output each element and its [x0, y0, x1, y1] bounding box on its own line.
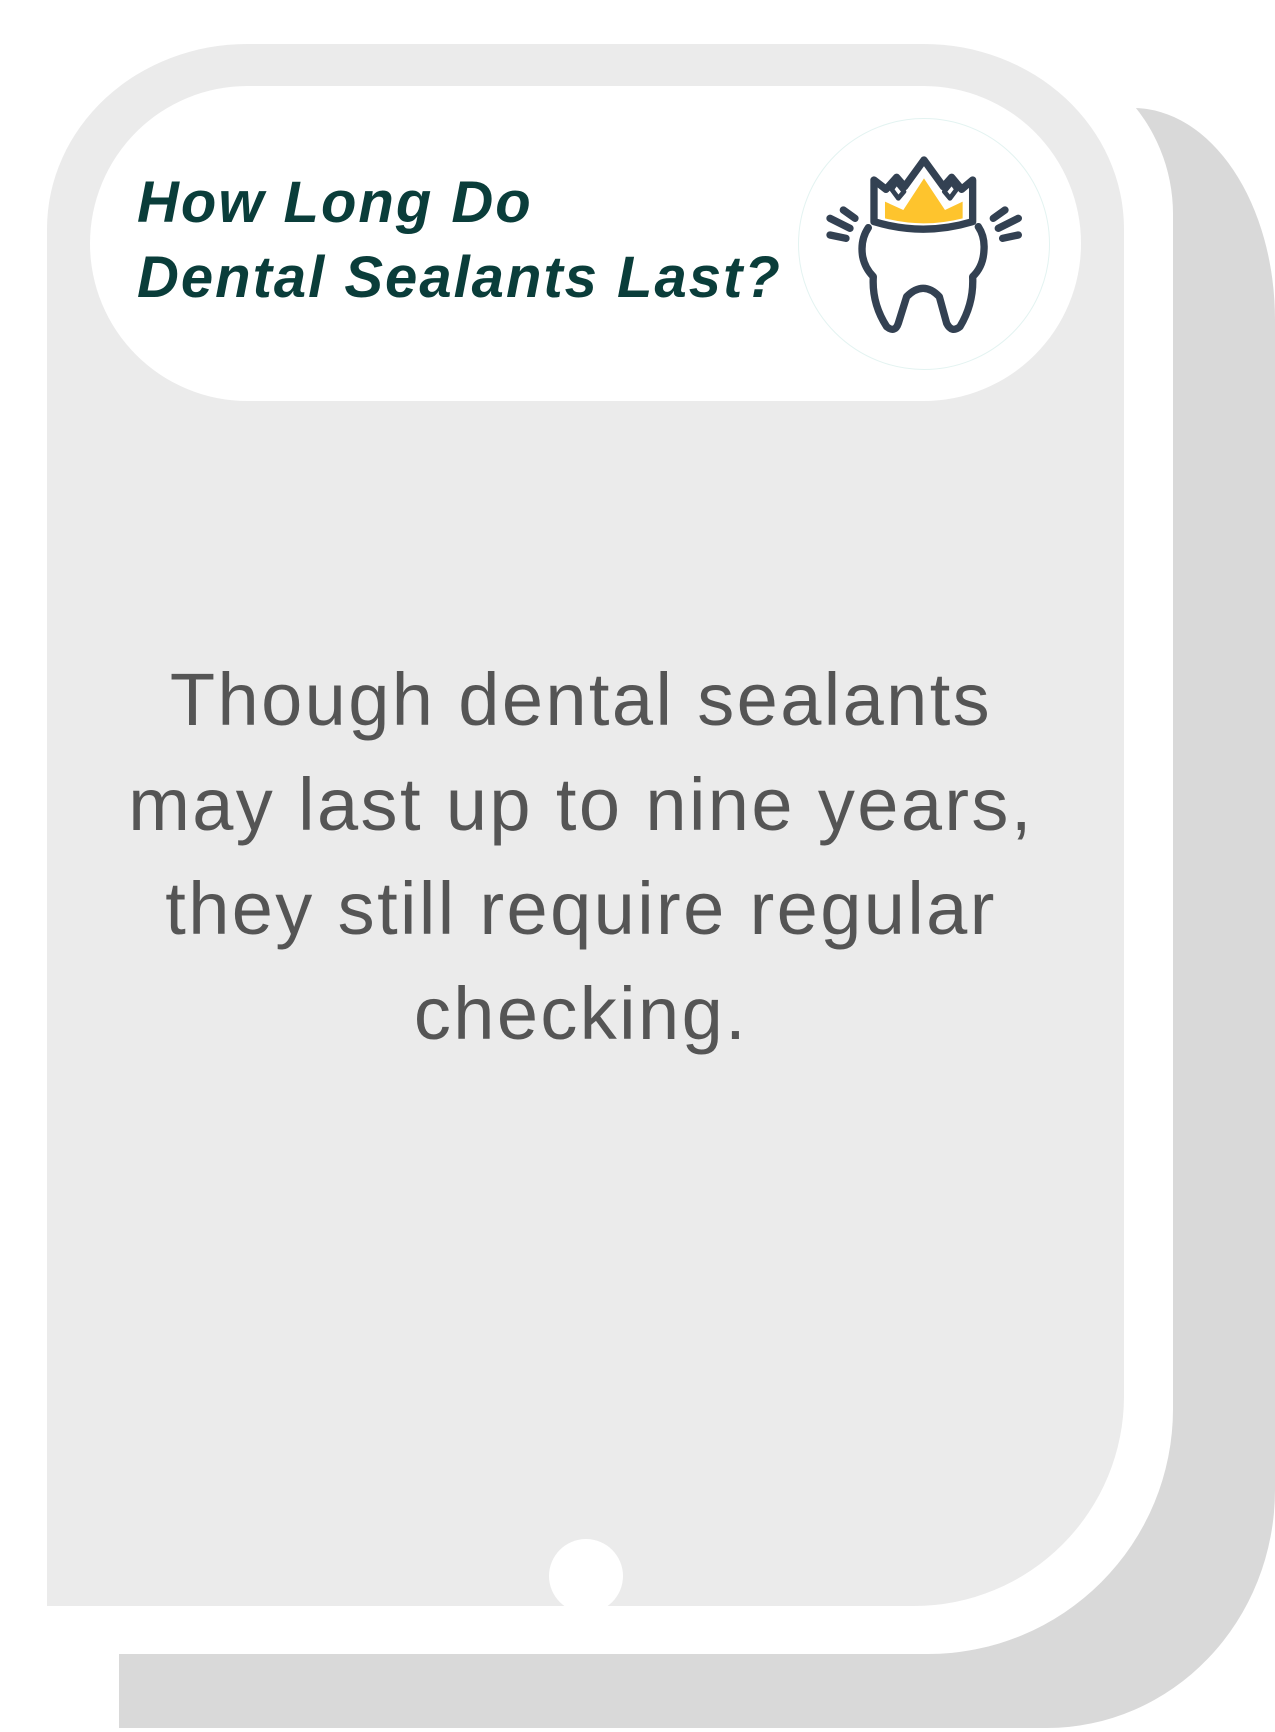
icon: tooth with crown	[798, 118, 1050, 370]
title: Dental Sealants Last?	[137, 245, 782, 310]
title	[137, 170, 782, 310]
tooth	[862, 227, 984, 329]
header pill	[90, 86, 1081, 401]
body text: Though dental sealants	[170, 658, 992, 741]
motion lines	[830, 210, 855, 238]
body text: they still require regular	[165, 867, 997, 950]
bottom button circle	[549, 1539, 623, 1613]
body text	[128, 658, 1034, 1054]
title: How Long Do	[137, 170, 533, 235]
body text: checking.	[414, 972, 748, 1054]
crown fill	[885, 178, 963, 223]
body text: may last up to nine years,	[128, 762, 1034, 846]
main gray panel	[47, 44, 1124, 1606]
crown outline	[874, 160, 973, 229]
